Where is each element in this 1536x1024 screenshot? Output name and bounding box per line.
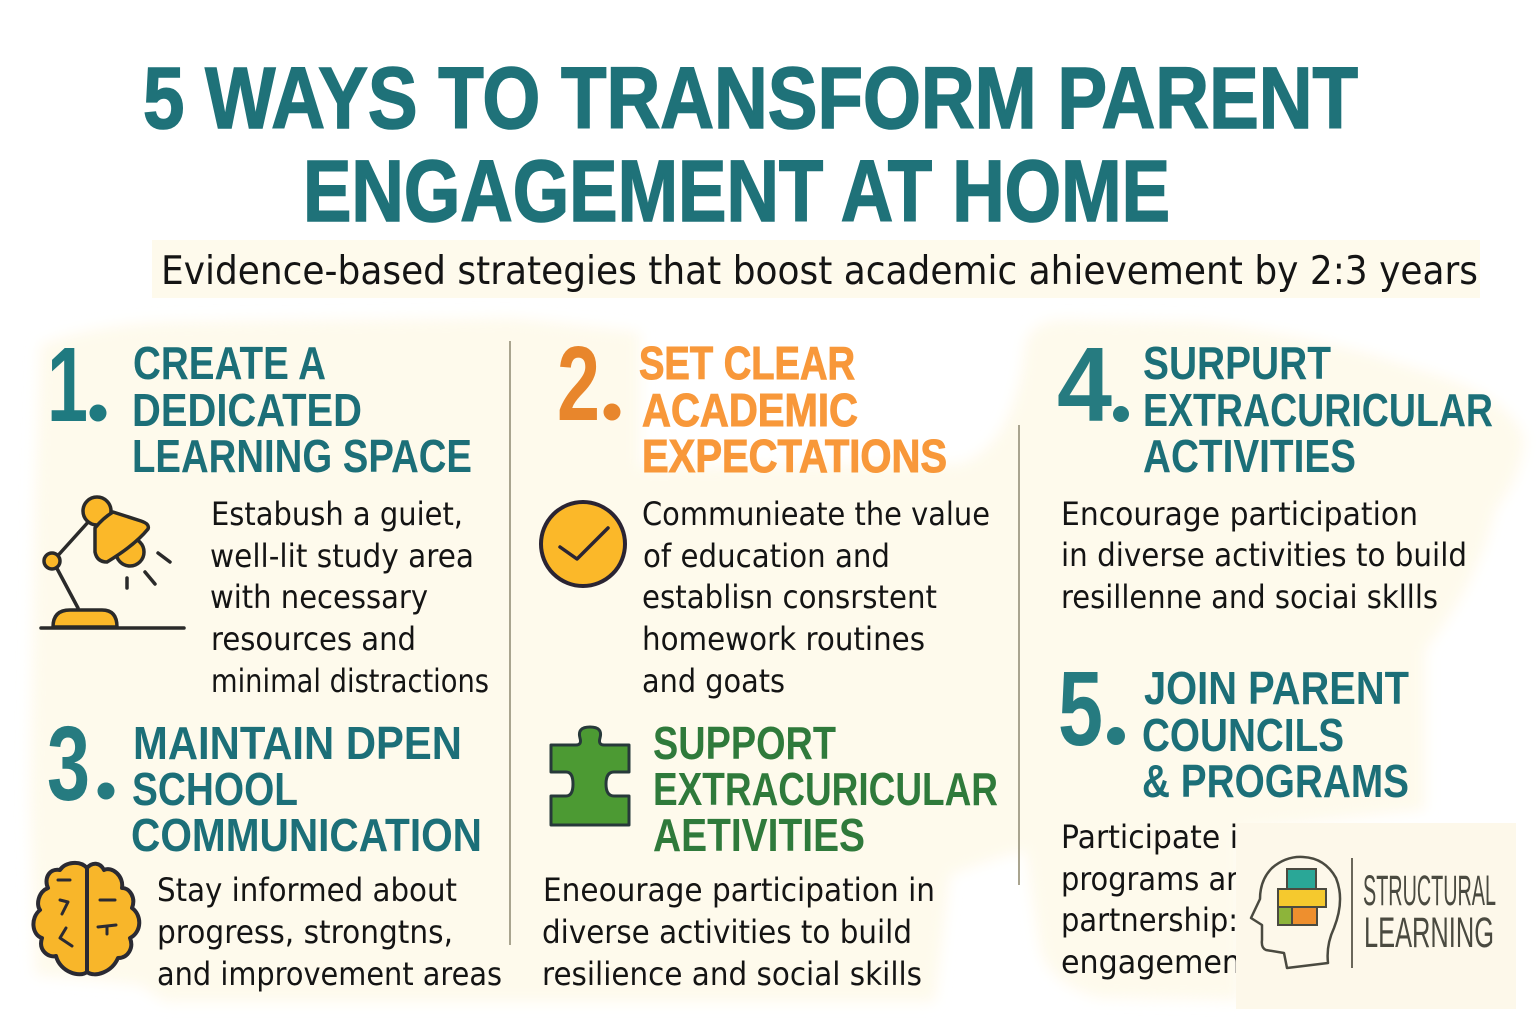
number 4: . [1111, 356, 1130, 434]
body text 2: homework routines [642, 620, 925, 658]
body text 2: of education and [643, 537, 890, 575]
title: ENGAGEMENT AT HOME [303, 143, 1170, 240]
column divider left [509, 341, 511, 945]
icon: head with blocks [1251, 857, 1340, 968]
heading 1: DEDICATED [132, 384, 362, 436]
body text 2 [642, 495, 990, 700]
body text 5: programs ar [1061, 860, 1239, 898]
heading 3: SCHOOL [132, 763, 298, 815]
body text 1: Estabush a guiet, [211, 495, 463, 533]
number 1: . [88, 355, 107, 433]
heading 5: JOIN PARENT [1144, 662, 1409, 714]
body text 3: Stay informed about [157, 871, 457, 909]
body text support: Eneourage participation in [543, 871, 935, 909]
body text 1: minimal distractions [211, 662, 489, 700]
body text 5: engagemen [1061, 943, 1241, 981]
panel: way 2 set clear academic expectations [541, 325, 990, 700]
body text 1: with necessary [210, 578, 428, 616]
heading 1: CREATE A [133, 337, 326, 389]
number 3: . [96, 733, 115, 811]
body text 3 [157, 871, 502, 993]
body text support [542, 871, 935, 993]
body text support: diverse activities to build [542, 913, 912, 951]
body text 1: well-lit study area [210, 537, 474, 575]
number 2: . [602, 354, 621, 432]
heading 2: SET CLEAR [639, 337, 855, 389]
icon: puzzle piece [551, 727, 629, 825]
body text 2: Communieate the value [642, 495, 990, 533]
heading 4: SURPURT [1143, 337, 1331, 389]
body text support: resilience and social skills [542, 955, 922, 993]
body text 2: and goats [642, 662, 785, 700]
body text 1 [210, 495, 489, 700]
body text 4 [1061, 495, 1467, 616]
body text 2: establisn consrstent [642, 578, 937, 616]
heading 2: ACADEMIC [642, 384, 858, 436]
title: 5 WAYS TO TRANSFORM PARENT [143, 50, 1358, 147]
cream background area [30, 318, 1525, 1002]
heading 1 [132, 337, 472, 482]
number 5: 5 [1058, 650, 1103, 768]
body text 3: progress, strongtns, [157, 913, 453, 951]
body text 5 [1061, 818, 1241, 981]
body text 3: and improvement areas [157, 955, 502, 993]
body text 1: resources and [211, 620, 416, 658]
number 2: 2 [557, 325, 600, 443]
heading support: AETIVITIES [653, 809, 865, 861]
icon: desk lamp [41, 497, 184, 628]
heading 1: LEARNING SPACE [132, 430, 472, 482]
heading 5: COUNCILS [1142, 709, 1344, 761]
body text 4: Encourage participation [1061, 495, 1418, 533]
number 5: . [1106, 678, 1125, 756]
heading 3: COMMUNICATION [131, 809, 482, 861]
icon: check circle [541, 502, 625, 586]
heading 2 [639, 337, 947, 482]
heading 5 [1142, 662, 1409, 807]
body text 4: in diverse activities to build [1061, 536, 1467, 574]
panel: way 4 support extracurricular activities [1057, 326, 1493, 616]
number 3: 3 [47, 705, 90, 823]
heading 4 [1143, 337, 1493, 482]
heading 3: MAINTAIN DPEN [133, 717, 462, 769]
heading support: SUPPORT [653, 717, 836, 769]
icon: brain [33, 863, 139, 974]
column divider right [1018, 425, 1020, 885]
heading support: EXTRACURICULAR [653, 763, 998, 815]
body text 4: resillenne and sociai skllls [1061, 578, 1438, 616]
heading support [653, 717, 998, 861]
body text 5: partnership: [1061, 901, 1238, 939]
number 1: 1 [47, 326, 88, 444]
body text 5: Participate i [1061, 818, 1238, 856]
panel: support extracurricular activities [542, 717, 998, 993]
heading 2: EXPECTATIONS [642, 430, 947, 482]
heading 5: & PROGRAMS [1142, 755, 1409, 807]
number 4: 4 [1057, 326, 1112, 444]
panel: way 3 maintain open school communication [33, 705, 502, 993]
panel: way 5 join parent councils and programs [1058, 650, 1409, 981]
title [143, 50, 1358, 240]
logo wordmark [1363, 867, 1496, 957]
heading 3 [131, 717, 482, 861]
panel: way 1 create a dedicated learning space [41, 326, 489, 700]
heading 4: ACTIVITIES [1143, 430, 1356, 482]
logo: structural learning [1236, 823, 1516, 1009]
